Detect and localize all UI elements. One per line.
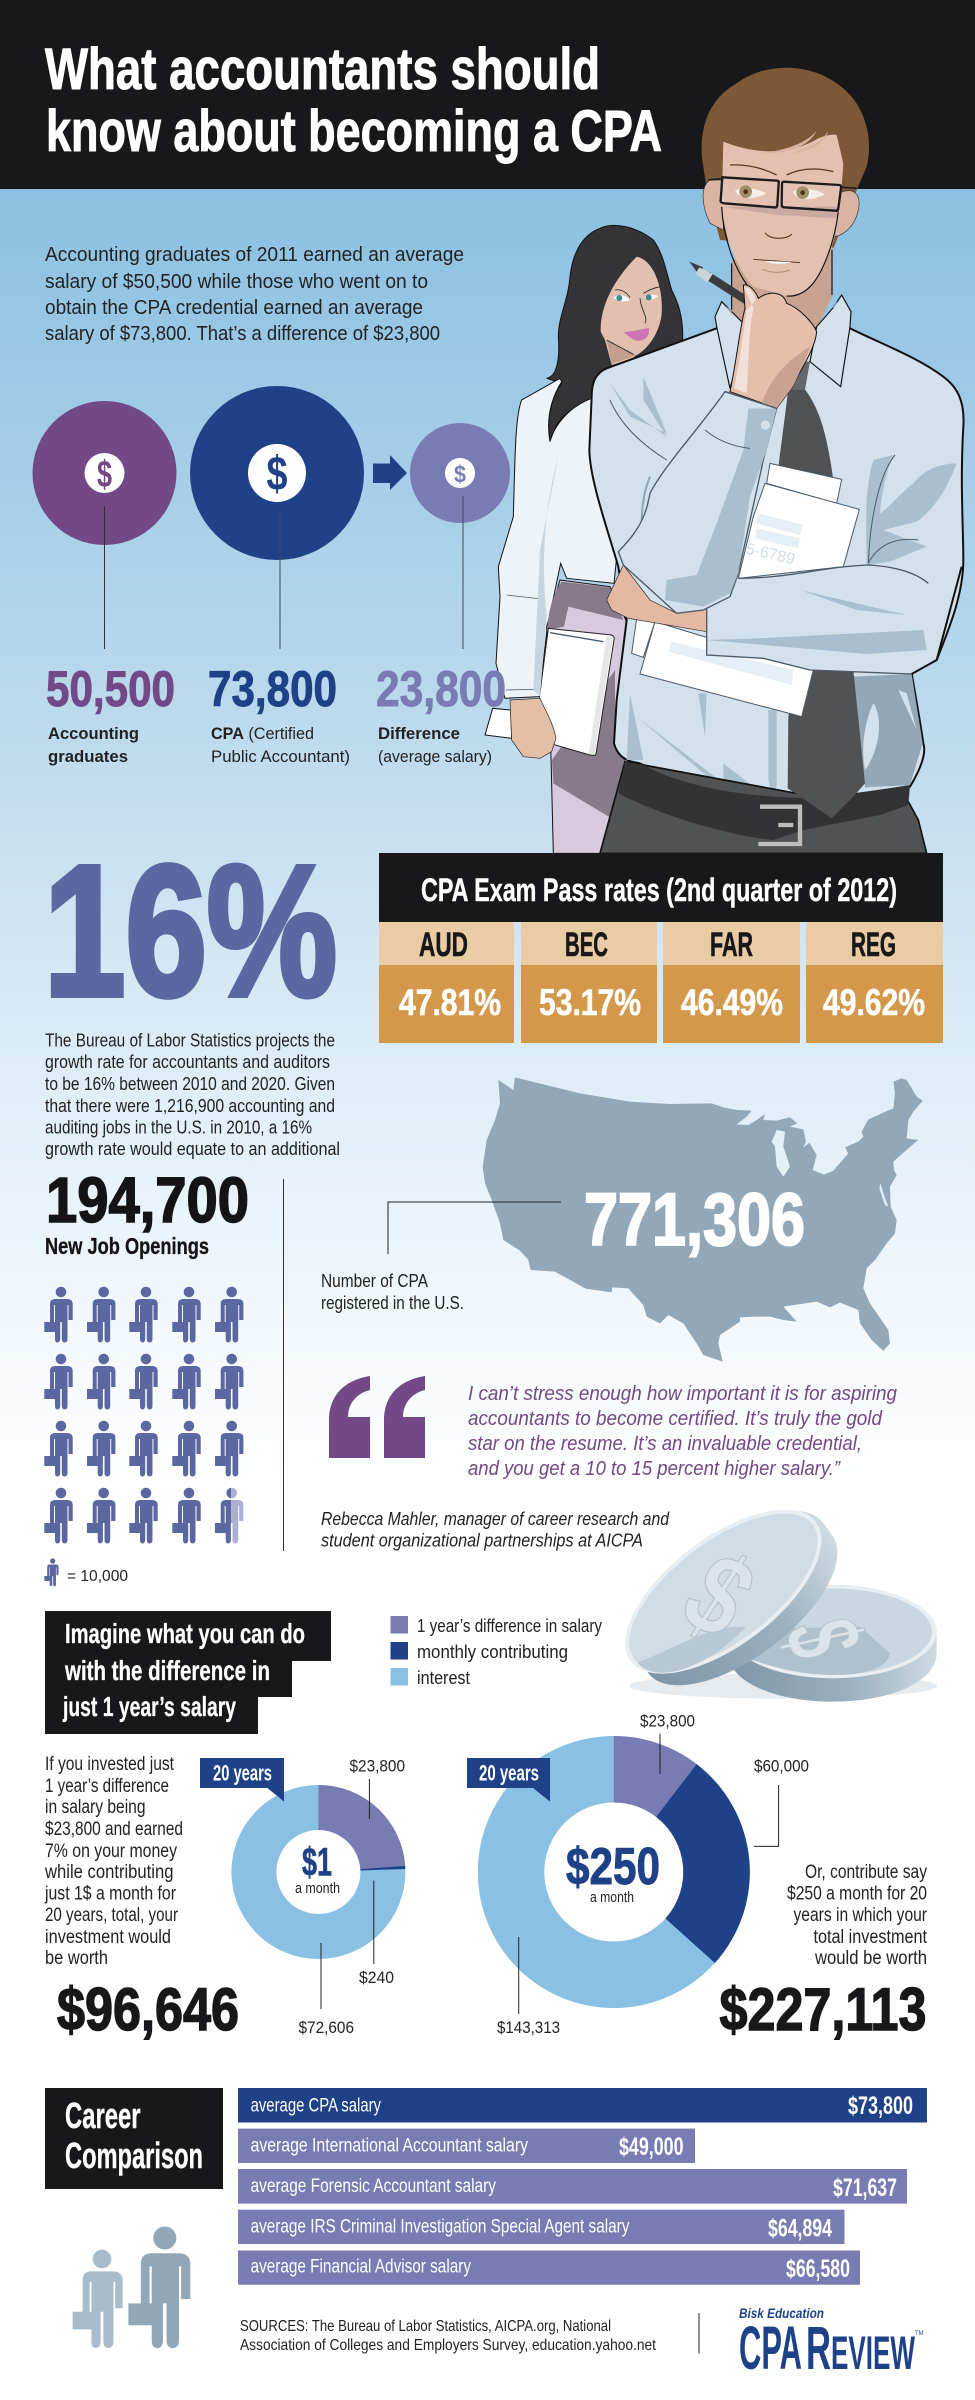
tag: 20 years: 20 years xyxy=(213,1761,272,1786)
heading: career comparison: Career xyxy=(65,2095,140,2136)
donut chart: $1 a month xyxy=(200,1756,405,2037)
job growth text: to be 16% between 2010 and 2020. Given xyxy=(45,1073,335,1094)
pass rate: FAR xyxy=(663,922,800,1043)
pass rate: REG xyxy=(806,922,943,1043)
pass rate: BEC: BEC xyxy=(565,926,608,964)
illustration: coins xyxy=(598,1476,937,1720)
callout: number of CPAs: Number of CPA xyxy=(321,1271,428,1291)
intro text: salary of $73,800. That’s a difference of $23,800 xyxy=(45,323,440,345)
pass rate: FAR: FAR xyxy=(710,926,753,964)
right investment text: $250 a month for 20 xyxy=(787,1884,927,1904)
illustration: man xyxy=(589,68,964,853)
stat: accounting graduates xyxy=(32,401,176,766)
map: United States xyxy=(483,1077,923,1362)
label: $143,313 xyxy=(497,1937,560,2037)
quote: accountants to become certified. It’s truly the gold xyxy=(468,1408,883,1430)
left investment text: be worth xyxy=(45,1948,108,1969)
stat: new job openings: 194,700 xyxy=(46,1164,249,1236)
title: What accountants should xyxy=(45,37,600,102)
label: $240 xyxy=(359,1881,394,1987)
icon: dollar coin navy: $ xyxy=(266,448,288,501)
right investment text xyxy=(787,1862,928,1969)
left investment text: If you invested just xyxy=(45,1754,175,1775)
bar: International Accountant xyxy=(238,2129,695,2163)
job growth text: The Bureau of Labor Statistics projects the xyxy=(45,1030,335,1050)
donut chart: $1 a month: $1 xyxy=(302,1840,332,1884)
stat: accounting graduates: 50,500 xyxy=(46,661,175,717)
job growth text: growth rate would equate to an additional xyxy=(45,1138,340,1159)
arrow xyxy=(373,455,407,490)
divider xyxy=(282,1179,284,1551)
callout: number of CPAs xyxy=(321,1202,561,1313)
title: know about becoming a CPA xyxy=(46,99,662,164)
left investment text: $23,800 and earned xyxy=(45,1819,183,1840)
pencil xyxy=(707,275,838,359)
heading: imagine xyxy=(45,1611,331,1734)
label: $23,800: $23,800 xyxy=(350,1756,405,1775)
icon: dollar coin navy xyxy=(248,444,306,502)
intro text: obtain the CPA credential earned an average xyxy=(45,297,423,319)
stat: difference xyxy=(376,423,510,766)
label: $240: $240 xyxy=(359,1968,394,1987)
job growth text: auditing jobs in the U.S. in 2010, a 16% xyxy=(45,1116,312,1138)
icon: dollar coin purple xyxy=(84,453,124,496)
bar: Financial Advisor xyxy=(238,2250,860,2285)
label: $72,606: $72,606 xyxy=(298,2018,354,2037)
heading: imagine: with the difference in xyxy=(64,1655,270,1686)
divider xyxy=(698,2313,700,2354)
bar: CPA: average CPA salary xyxy=(251,2096,381,2117)
label: $60,000 xyxy=(754,1756,809,1846)
stat: difference: Difference xyxy=(378,724,460,743)
sources xyxy=(240,2318,656,2354)
bar: International Accountant: $49,000 xyxy=(619,2133,684,2161)
logo: Bisk Education CPA Review: Bisk Education xyxy=(739,2305,824,2321)
job growth text: that there were 1,216,900 accounting and xyxy=(45,1095,335,1116)
label: $60,000: $60,000 xyxy=(754,1756,809,1775)
bar: Forensic Accountant: average Forensic Accountant salary xyxy=(251,2176,496,2197)
front coin xyxy=(598,1476,864,1720)
arms xyxy=(607,565,962,674)
bar: IRS Criminal Investigation Special Agent: average IRS Criminal Investigation Special Agent salary xyxy=(251,2217,630,2238)
bar chart: career comparison xyxy=(238,2088,927,2285)
back coin: $ xyxy=(760,1610,885,1667)
right investment text: would be worth xyxy=(814,1948,927,1969)
quote attribution: Rebecca Mahler, manager of career research and xyxy=(321,1509,670,1529)
right investment text: years in which your xyxy=(794,1905,928,1926)
left investment text: just 1$ a month for xyxy=(44,1884,177,1904)
stat: new job openings xyxy=(45,1164,249,1259)
icon: dollar coin periwinkle: $ xyxy=(454,461,467,488)
bar: CPA xyxy=(238,2088,927,2122)
sources: Association of Colleges and Employers Survey, education.yahoo.net xyxy=(240,2337,656,2354)
callout: number of CPAs: registered in the U.S. xyxy=(321,1293,464,1313)
bar: Financial Advisor: average Financial Advisor salary xyxy=(251,2256,471,2278)
panel: CPA exam pass rates xyxy=(379,853,943,1043)
chart legend: 1 year’s difference in salary xyxy=(417,1616,602,1636)
logo: Bisk Education CPA Review: CPA xyxy=(739,2314,802,2382)
left investment text xyxy=(44,1754,183,1969)
bar: CPA: $73,800 xyxy=(848,2092,913,2120)
map value: 771,306 xyxy=(584,1178,805,1261)
stat: CPA: Public Accountant) xyxy=(211,747,350,766)
chart legend: monthly contributing xyxy=(417,1642,568,1662)
total: 227,113: $227,113 xyxy=(720,1976,926,2043)
intro text xyxy=(45,244,464,345)
collar xyxy=(715,295,851,388)
pictogram legend: = 10,000 xyxy=(67,1568,128,1585)
illustration: coins: $ xyxy=(661,1529,776,1663)
left investment text: 7% on your money xyxy=(45,1841,177,1862)
pass rate: BEC xyxy=(521,922,657,1043)
logo: Bisk Education CPA Review: TM xyxy=(915,2331,924,2337)
pass rate: BEC: 53.17% xyxy=(539,982,641,1023)
donut chart: $250 a month xyxy=(467,1712,809,2037)
stat: CPA: CPA (Certified xyxy=(211,724,314,743)
header band xyxy=(0,0,975,189)
stat: accounting graduates: graduates xyxy=(48,747,128,766)
donut chart: $250 a month: $250 xyxy=(566,1838,660,1896)
right investment text: Or, contribute say xyxy=(805,1862,927,1883)
bar: International Accountant: average International Accountant salary xyxy=(251,2136,528,2156)
pass rate: REG: REG xyxy=(851,926,896,964)
logo: Bisk Education CPA Review xyxy=(739,2305,924,2382)
left investment text: in salary being xyxy=(45,1797,146,1818)
donut chart: $250 a month: a month xyxy=(590,1889,634,1906)
intro text: salary of $50,500 while those who went on to xyxy=(45,271,428,293)
right investment text: total investment xyxy=(814,1927,928,1948)
tag: 20 years: 20 years xyxy=(479,1761,539,1786)
stat: new job openings: New Job Openings xyxy=(45,1233,209,1259)
job growth text xyxy=(45,1030,340,1159)
quote: and you get a 10 to 15 percent higher salary.” xyxy=(468,1458,841,1480)
bar: IRS Criminal Investigation Special Agent: $64,894 xyxy=(768,2215,832,2243)
pass rate: AUD: 47.81% xyxy=(399,982,501,1023)
heading: imagine: just 1 year’s salary xyxy=(62,1691,236,1722)
left investment text: 20 years, total, your xyxy=(45,1905,179,1926)
papers: 5-6789 xyxy=(744,541,797,568)
tag: 20 years xyxy=(200,1758,284,1802)
title xyxy=(45,37,662,164)
stat: accounting graduates: Accounting xyxy=(48,724,139,743)
quote xyxy=(468,1383,897,1480)
belt and trousers xyxy=(600,762,927,853)
stat: difference: 23,800 xyxy=(376,661,506,717)
shirt and torso xyxy=(589,328,964,798)
stat: CPA: 73,800 xyxy=(208,661,337,717)
icon: quotation marks xyxy=(329,1376,425,1458)
label: $143,313: $143,313 xyxy=(497,2018,560,2037)
left investment text: while contributing xyxy=(44,1862,174,1883)
pictogram: job openings people xyxy=(44,1287,243,1544)
left investment text: 1 year’s difference xyxy=(45,1776,169,1797)
quote: star on the resume. It’s an invaluable credential, xyxy=(468,1433,862,1455)
back coin xyxy=(728,1585,937,1702)
quote attribution: student organizational partnerships at AICPA xyxy=(321,1530,643,1550)
pictogram legend xyxy=(44,1558,128,1586)
quote attribution xyxy=(321,1509,670,1550)
pass rate: AUD xyxy=(379,922,514,1043)
icon: dollar coin purple: $ xyxy=(97,454,112,496)
left investment text: investment would xyxy=(45,1927,171,1948)
heading: career comparison: Comparison xyxy=(65,2135,203,2176)
pass rate: FAR: 46.49% xyxy=(681,982,783,1023)
tag: 20 years xyxy=(467,1758,550,1802)
heading: imagine: Imagine what you can do xyxy=(65,1618,305,1649)
chart legend xyxy=(390,1616,602,1688)
icon: dollar coin periwinkle xyxy=(445,458,475,488)
label: $72,606 xyxy=(298,1943,354,2037)
intro text: Accounting graduates of 2011 earned an average xyxy=(45,244,464,266)
stat: difference: (average salary) xyxy=(378,747,492,766)
label: $23,800: $23,800 xyxy=(640,1712,695,1730)
sources: SOURCES: The Bureau of Labor Statistics, AICPA.org, National xyxy=(240,2318,611,2335)
bar: Forensic Accountant xyxy=(238,2169,907,2204)
illustration: woman xyxy=(485,225,683,853)
label: $23,800 xyxy=(350,1756,405,1819)
bar: Forensic Accountant: $71,637 xyxy=(833,2174,897,2202)
bar: Financial Advisor: $66,580 xyxy=(786,2255,850,2283)
donut chart: $1 a month: a month xyxy=(295,1880,340,1897)
logo: Bisk Education CPA Review: R xyxy=(806,2314,831,2382)
pass rate: REG: 49.62% xyxy=(823,982,925,1023)
pass rate: AUD: AUD xyxy=(419,926,468,964)
total: 96,646: $96,646 xyxy=(57,1976,239,2043)
papers xyxy=(632,463,859,717)
hair xyxy=(702,68,869,248)
fist xyxy=(730,285,817,408)
icon: two professionals xyxy=(73,2226,190,2348)
chart legend: interest xyxy=(417,1668,470,1688)
job growth text: growth rate for accountants and auditors xyxy=(45,1051,330,1072)
stat: CPA xyxy=(190,386,364,766)
heading: career comparison xyxy=(45,2088,223,2189)
label: $23,800 xyxy=(640,1712,695,1774)
tie xyxy=(777,362,865,818)
big number: 16%: 16% xyxy=(44,828,337,1035)
bar: IRS Criminal Investigation Special Agent xyxy=(238,2210,844,2244)
quote: I can’t stress enough how important it is for aspiring xyxy=(468,1383,897,1405)
